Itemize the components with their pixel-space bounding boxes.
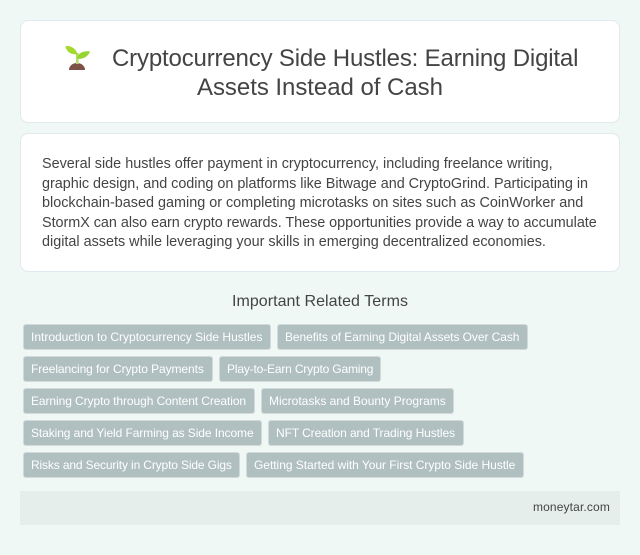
title: Cryptocurrency Side Hustles: Earning Digital xyxy=(112,45,578,72)
tag: Risks and Security in Crypto Side Gigs xyxy=(31,458,232,472)
tag list xyxy=(23,324,528,478)
tag: Play-to-Earn Crypto Gaming xyxy=(227,362,373,376)
panel: title card xyxy=(20,20,620,123)
tag xyxy=(23,324,271,350)
tag xyxy=(23,420,262,446)
footer source: moneytar.com xyxy=(533,500,610,514)
description text xyxy=(42,156,597,250)
tag xyxy=(23,452,240,478)
tag: Benefits of Earning Digital Assets Over Cash xyxy=(285,330,519,344)
tag: NFT Creation and Trading Hustles xyxy=(276,426,455,440)
tag: Getting Started with Your First Crypto Side Hustle xyxy=(254,458,515,472)
tag: Freelancing for Crypto Payments xyxy=(31,362,204,376)
tag xyxy=(219,356,381,382)
footer bar xyxy=(20,491,620,525)
title: Assets Instead of Cash xyxy=(197,74,443,101)
tag xyxy=(261,388,454,414)
description text: StormX can also earn crypto rewards. These opportunities provide a way to accumulate xyxy=(42,215,597,231)
tag: Introduction to Cryptocurrency Side Hustles xyxy=(31,330,262,344)
description text: Several side hustles offer payment in cryptocurrency, including freelance writing, xyxy=(42,156,553,172)
tag: Staking and Yield Farming as Side Income xyxy=(31,426,254,440)
description text: graphic design, and coding on platforms like Bitwage and CryptoGrind. Participating in xyxy=(42,176,588,192)
heading: related terms: Important Related Terms xyxy=(232,293,408,310)
panel: description card xyxy=(20,133,620,272)
description text: blockchain-based gaming or completing microtasks on sites such as CoinWorker and xyxy=(42,195,583,211)
icon: seedling xyxy=(66,46,90,70)
tag xyxy=(23,388,255,414)
tag xyxy=(268,420,464,446)
description text: digital assets while leveraging your skills in emerging decentralized economies. xyxy=(42,234,546,250)
tag xyxy=(23,356,213,382)
title xyxy=(112,45,578,101)
tag xyxy=(246,452,524,478)
tag: Earning Crypto through Content Creation xyxy=(31,394,246,408)
tag xyxy=(277,324,528,350)
tag: Microtasks and Bounty Programs xyxy=(269,394,446,408)
